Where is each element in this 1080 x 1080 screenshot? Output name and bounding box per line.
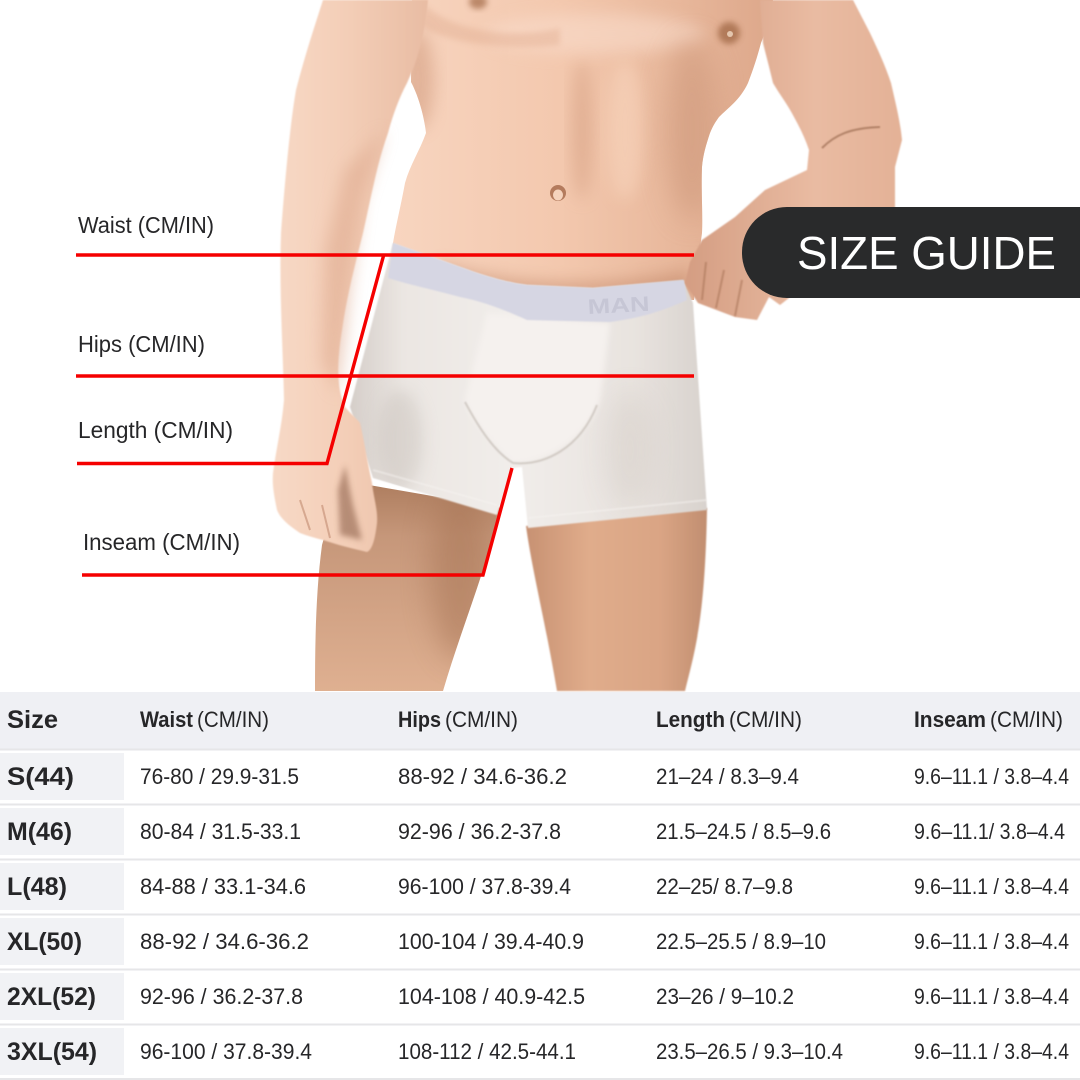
row 2XL(52): 92-96 / 36.2-37.8	[140, 984, 303, 1009]
table header: Size	[7, 706, 58, 734]
table header: (CM/IN)	[729, 707, 802, 732]
row XL(50): XL(50)	[7, 928, 82, 956]
row M(46): 21.5–24.5 / 8.5–9.6	[656, 819, 831, 844]
nipples	[718, 22, 740, 44]
row 2XL(52)	[7, 983, 1069, 1011]
waistband brand mark: MAN	[587, 293, 650, 319]
table header: Inseam	[914, 707, 986, 732]
row M(46): 92-96 / 36.2-37.8	[398, 819, 561, 844]
inseam line	[82, 468, 512, 575]
size guide badge	[742, 207, 1080, 298]
row L(48): 22–25/ 8.7–9.8	[656, 874, 793, 899]
hips line	[76, 374, 694, 378]
table header: (CM/IN)	[197, 707, 269, 732]
row S(44): 88-92 / 34.6-36.2	[398, 764, 567, 789]
size table	[0, 692, 1080, 1079]
right arm and hand	[685, 0, 902, 320]
row XL(50): 100-104 / 39.4-40.9	[398, 929, 584, 954]
waistband	[388, 243, 687, 322]
row 3XL(54): 3XL(54)	[7, 1038, 97, 1066]
torso	[380, 0, 780, 300]
row 3XL(54): 108-112 / 42.5-44.1	[398, 1039, 576, 1064]
row L(48)	[7, 873, 1069, 901]
navel	[550, 185, 566, 201]
row 2XL(52): 2XL(52)	[7, 983, 96, 1011]
row 3XL(54)	[7, 1038, 1069, 1066]
table header: Hips	[398, 707, 441, 732]
table header: (CM/IN)	[990, 707, 1063, 732]
label: inseam: Inseam (CM/IN)	[83, 529, 240, 555]
row XL(50)	[7, 928, 1069, 956]
row S(44)	[7, 763, 1069, 791]
left hand finger shading	[338, 465, 362, 540]
table header: Waist	[140, 707, 194, 732]
table header background	[0, 692, 1080, 749]
row L(48): 84-88 / 33.1-34.6	[140, 874, 306, 899]
waist line	[76, 253, 694, 257]
measurement lines	[76, 254, 694, 575]
right leg	[526, 508, 707, 691]
table header	[7, 706, 1063, 734]
label: waist: Waist (CM/IN)	[78, 212, 214, 238]
label: length: Length (CM/IN)	[78, 417, 233, 443]
length line	[77, 254, 384, 464]
left arm	[273, 0, 428, 552]
row L(48): L(48)	[7, 873, 67, 901]
row S(44): 76-80 / 29.9-31.5	[140, 764, 299, 789]
row L(48): 96-100 / 37.8-39.4	[398, 874, 571, 899]
left forearm shading	[322, 130, 385, 395]
row XL(50): 88-92 / 34.6-36.2	[140, 929, 309, 954]
measurement labels	[78, 212, 240, 555]
row M(46): 9.6–11.1/ 3.8–4.4	[914, 819, 1065, 844]
row dividers	[0, 750, 1080, 1079]
size column cells	[0, 753, 124, 1075]
row XL(50): 22.5–25.5 / 8.9–10	[656, 929, 826, 954]
row M(46): M(46)	[7, 818, 72, 846]
badge title: SIZE GUIDE	[797, 227, 1056, 279]
left leg	[315, 486, 500, 691]
table header: (CM/IN)	[445, 707, 518, 732]
photo: model wearing boxer briefs	[273, 0, 902, 692]
boxer briefs	[350, 243, 707, 528]
pouch	[566, 323, 608, 440]
row 3XL(54): 23.5–26.5 / 9.3–10.4	[656, 1039, 843, 1064]
row M(46): 80-84 / 31.5-33.1	[140, 819, 301, 844]
row 2XL(52): 23–26 / 9–10.2	[656, 984, 794, 1009]
elbow crease	[822, 127, 880, 148]
finger lines	[702, 262, 742, 316]
table header: Length	[656, 707, 725, 732]
row 2XL(52): 104-108 / 40.9-42.5	[398, 984, 585, 1009]
row 3XL(54): 96-100 / 37.8-39.4	[140, 1039, 312, 1064]
row S(44): S(44)	[7, 763, 74, 791]
row M(46)	[7, 818, 1065, 846]
row S(44): 21–24 / 8.3–9.4	[656, 764, 799, 789]
label: hips: Hips (CM/IN)	[78, 331, 205, 357]
hems	[374, 470, 706, 508]
left hand knuckle shading	[300, 500, 330, 538]
